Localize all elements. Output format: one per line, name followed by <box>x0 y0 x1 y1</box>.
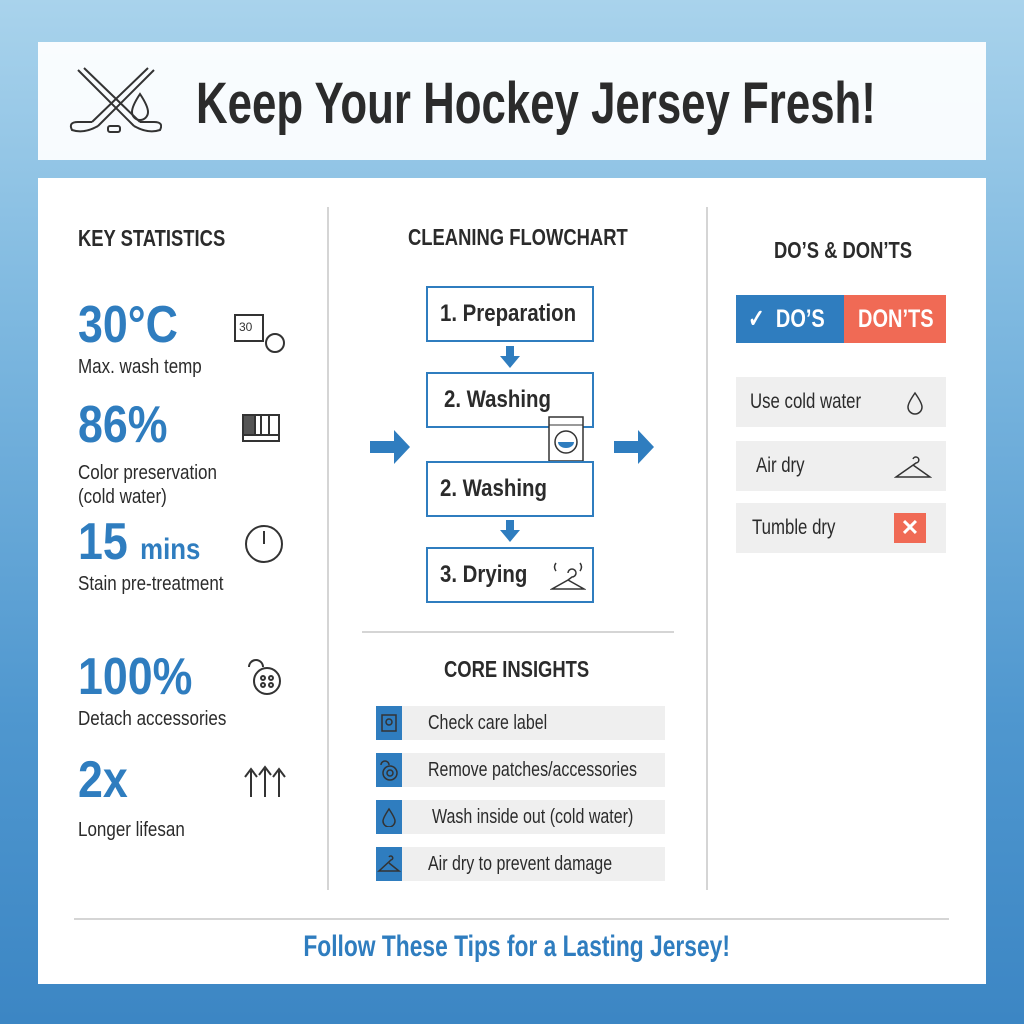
insight: air dry <box>376 847 665 881</box>
stat: 100% <box>78 648 226 730</box>
tab: dos <box>736 295 844 343</box>
box: drying: 3. Drying <box>440 561 527 588</box>
heading: dos and donts: DO’S & DON’TS <box>774 237 912 263</box>
stat: 2x: 2x <box>78 751 128 809</box>
panel: do's and don'ts <box>736 237 946 553</box>
stat: 15 mins: Stain pre-treatment <box>78 573 224 595</box>
panel: key statistics <box>78 225 286 841</box>
main panel <box>38 178 986 984</box>
panel: cleaning flowchart <box>370 224 654 603</box>
heading: key statistics: KEY STATISTICS <box>78 225 225 251</box>
stat: 100%: Detach accessories <box>78 708 226 730</box>
icon: wash label <box>234 314 285 353</box>
footer tagline: Follow These Tips for a Lasting Jersey! <box>304 930 730 963</box>
icon: clock <box>245 525 283 563</box>
icon: button <box>248 659 281 695</box>
stat: 30C <box>78 296 202 378</box>
stat: 86%: (cold water) <box>78 486 167 508</box>
stat: 15 mins <box>78 513 224 595</box>
heading: core insights: CORE INSIGHTS <box>444 656 589 682</box>
stat: 100%: 100% <box>78 648 192 706</box>
icon: wash label: 30 <box>239 320 253 334</box>
box: washing 2 <box>426 461 594 517</box>
icon: hanger steam <box>550 562 586 590</box>
stat: 30C: 30°C <box>78 296 178 354</box>
tab: donts: DON’TS <box>858 304 934 332</box>
icon: washing machine <box>548 416 584 461</box>
item: tumble dry: Tumble dry <box>752 516 835 539</box>
title: Keep Your Hockey Jersey Fresh! <box>196 71 876 136</box>
arrow left <box>370 430 410 464</box>
stat: 2x <box>78 751 185 841</box>
box: washing 2: 2. Washing <box>440 475 547 502</box>
insight: care label: Check care label <box>428 712 547 734</box>
insight: remove patches <box>376 753 665 787</box>
box: washing <box>426 372 594 428</box>
item: tumble dry: ✕ <box>901 515 919 540</box>
icon: arrows up <box>244 766 286 797</box>
stat: 2x: Longer lifesan <box>78 819 185 841</box>
icon: color swatch <box>242 414 280 442</box>
header panel <box>38 42 986 160</box>
item: air dry <box>736 441 946 491</box>
insight: care label <box>376 706 665 740</box>
box: preparation: 1. Preparation <box>440 300 576 327</box>
insight: wash inside out <box>376 800 665 834</box>
box: drying <box>426 547 594 603</box>
insight: air dry: Air dry to prevent damage <box>428 852 612 874</box>
panel: core insights <box>376 656 665 881</box>
insight: remove patches: Remove patches/accessories <box>428 758 637 780</box>
arrow down <box>500 346 520 368</box>
stat: 30C: Max. wash temp <box>78 356 202 378</box>
item: tumble dry <box>736 503 946 553</box>
stat: 15 mins: 15 mins <box>78 513 200 571</box>
item: cold water <box>736 377 946 427</box>
box: washing: 2. Washing <box>444 386 551 413</box>
stat: 86%: Color preservation <box>78 462 217 484</box>
tab: donts <box>844 295 946 343</box>
icon: crossed hockey sticks <box>70 67 162 133</box>
item: air dry: Air dry <box>756 454 805 477</box>
stat: 86% <box>78 396 217 508</box>
arrow down 2 <box>500 520 520 542</box>
stat: 86%: 86% <box>78 396 168 454</box>
tab: dos: ✓ DO’S <box>748 305 825 333</box>
box: preparation <box>426 286 594 342</box>
insight: wash inside out: Wash inside out (cold water) <box>432 806 633 828</box>
arrow right <box>614 430 654 464</box>
heading: cleaning flowchart: CLEANING FLOWCHART <box>408 224 628 250</box>
item: cold water: Use cold water <box>750 390 861 413</box>
